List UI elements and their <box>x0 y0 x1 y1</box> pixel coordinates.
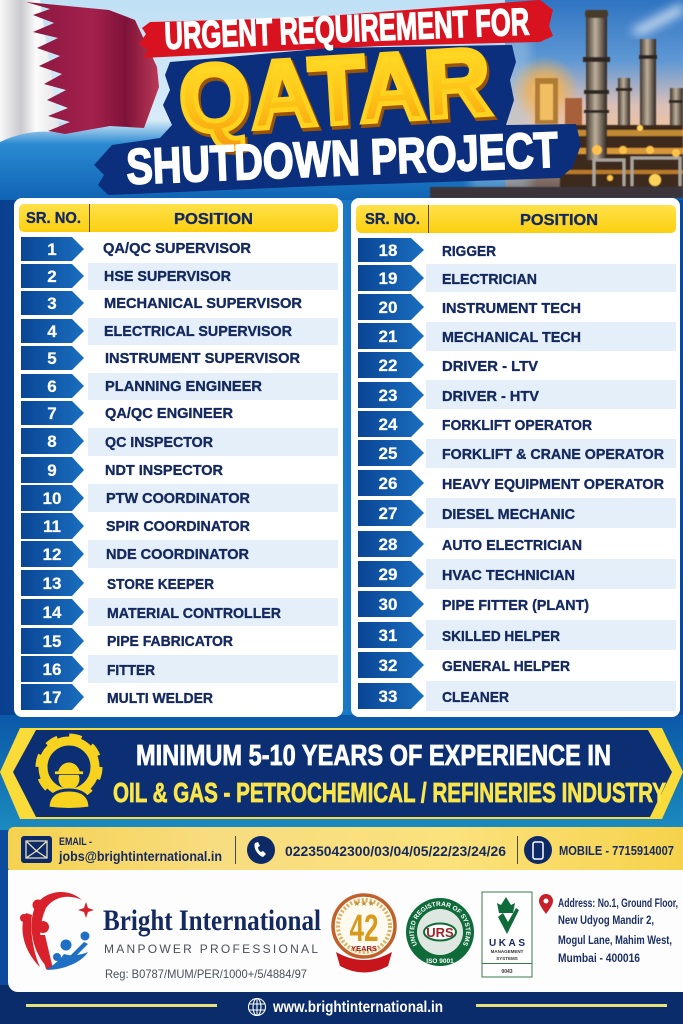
row 1: 1 <box>47 240 57 259</box>
row 4 <box>21 318 338 345</box>
icon: globe <box>248 998 266 1016</box>
row 10 <box>21 484 338 512</box>
row 12: 12 <box>43 545 61 564</box>
refinery illustration <box>430 10 683 198</box>
title: QATAR: QATAR <box>178 31 496 157</box>
website: www.brightinternational.in <box>272 999 443 1016</box>
row 15: 15 <box>43 632 61 651</box>
row 30 <box>358 591 589 617</box>
row 24: 24 <box>379 415 398 434</box>
row 23: 23 <box>379 386 397 405</box>
row 15: PIPE FABRICATOR <box>107 633 233 650</box>
row 7: QA/QC ENGINEER <box>105 405 233 422</box>
row 11: SPIR COORDINATOR <box>106 518 250 535</box>
footer <box>26 998 667 1016</box>
row 7 <box>21 401 233 425</box>
row 26: HEAVY EQUIPMENT OPERATOR <box>442 476 664 493</box>
row 2: HSE SUPERVISOR <box>104 268 231 285</box>
red brush banner <box>139 0 553 58</box>
address <box>558 898 678 965</box>
badge: URS ISO 9001 <box>406 898 474 966</box>
row 19: 19 <box>379 269 397 288</box>
row 12: NDE COORDINATOR <box>106 546 249 563</box>
contact strip <box>8 827 683 873</box>
row 5: INSTRUMENT SUPERVISOR <box>105 350 300 367</box>
row 18: RIGGER <box>442 243 496 260</box>
row 33: CLEANER <box>442 689 509 706</box>
badge: UKAS: 0043 <box>501 969 513 975</box>
row 9 <box>21 457 223 483</box>
icon: email <box>21 836 52 863</box>
navy brush behind title <box>94 45 581 195</box>
left table header <box>19 204 338 232</box>
row 28: 28 <box>379 535 397 554</box>
row 33 <box>358 681 676 711</box>
row 11: 11 <box>43 517 61 536</box>
row 32: GENERAL HELPER <box>442 658 570 675</box>
row 23: DRIVER - HTV <box>442 388 539 405</box>
row 6 <box>21 373 338 400</box>
title: shutdown project: SHUTDOWN PROJECT <box>125 122 559 195</box>
row 18: 18 <box>379 241 397 260</box>
left table header: POSITION <box>174 211 253 228</box>
title: QATAR: QATAR <box>176 28 494 154</box>
badge: URS ISO 9001: URS <box>426 925 454 940</box>
row 29: HVAC TECHNICIAN <box>442 567 575 584</box>
row 19 <box>358 264 676 292</box>
row 14: MATERIAL CONTROLLER <box>107 605 281 622</box>
tagline: MANPOWER PROFESSIONAL <box>104 942 318 956</box>
badge: UKAS <box>482 892 532 977</box>
badge: UKAS: SYSTEMS <box>496 956 518 961</box>
row 7: 7 <box>47 404 57 423</box>
row 3: 3 <box>47 294 57 313</box>
row 24: FORKLIFT OPERATOR <box>442 417 592 434</box>
row 15 <box>21 628 233 654</box>
row 13: STORE KEEPER <box>107 576 214 593</box>
left table header: SR. NO. <box>26 210 81 227</box>
row 25: 25 <box>379 444 397 463</box>
row 1 <box>21 237 251 261</box>
right table header: POSITION <box>520 212 598 229</box>
row 20: 20 <box>379 298 397 317</box>
badge: URS ISO 9001: UNITED REGISTRAR OF SYSTEMS <box>410 902 471 946</box>
row 23 <box>358 380 676 409</box>
row 5: 5 <box>47 349 57 368</box>
icon: gear with worker <box>39 737 99 810</box>
flag of Qatar <box>0 0 159 142</box>
row 27 <box>358 498 676 528</box>
row 31: SKILLED HELPER <box>442 628 560 645</box>
email text <box>58 836 222 864</box>
row 8: QC INSPECTOR <box>105 434 213 451</box>
row 1: QA/QC SUPERVISOR <box>103 240 251 257</box>
company name: Bright International <box>103 904 321 937</box>
row 13 <box>21 570 214 596</box>
panel: left table <box>14 198 343 717</box>
header photo background <box>0 0 683 200</box>
icon: phone <box>247 836 275 864</box>
row 31 <box>358 620 676 650</box>
row 19: ELECTRICIAN <box>442 271 537 288</box>
badge: 42 years: YEARS <box>351 944 377 953</box>
row 14: 14 <box>43 603 62 622</box>
row 17 <box>21 684 213 710</box>
row 29: 29 <box>379 565 397 584</box>
icon: location pin <box>539 894 553 914</box>
row 32: 32 <box>379 656 397 675</box>
row 26 <box>358 470 664 496</box>
row 11 <box>21 513 250 539</box>
row 27: DIESEL MECHANIC <box>442 506 575 523</box>
row 22 <box>358 352 538 378</box>
row 3 <box>21 291 302 315</box>
row 6: PLANNING ENGINEER <box>105 378 262 395</box>
logo mark <box>20 892 94 970</box>
row 30: 30 <box>379 595 397 614</box>
row 28: AUTO ELECTRICIAN <box>442 537 582 554</box>
row 14 <box>21 598 338 626</box>
badge: URS ISO 9001: ISO 9001 <box>426 958 454 965</box>
experience banner <box>0 728 683 819</box>
row 5 <box>21 346 300 370</box>
row 16: FITTER <box>107 662 155 679</box>
row 24 <box>358 411 592 437</box>
row 33: 33 <box>379 687 397 706</box>
row 2: 2 <box>47 267 57 286</box>
row 21: MECHANICAL TECH <box>442 329 581 346</box>
row 22: 22 <box>379 356 397 375</box>
row 32 <box>358 652 570 678</box>
row 25 <box>358 439 676 468</box>
company panel <box>8 870 683 992</box>
badge: 42 years: 42 <box>350 908 378 950</box>
phone numbers: 02235042300/03/04/05/22/23/24/26 <box>285 843 506 859</box>
row 26: 26 <box>379 474 397 493</box>
row 27: 27 <box>379 504 397 523</box>
row 6: 6 <box>47 377 57 396</box>
address: New Udyog Mandir 2, <box>558 915 654 927</box>
row 18 <box>358 238 496 262</box>
row 16 <box>21 655 338 683</box>
row 28 <box>358 531 582 557</box>
row 4: ELECTRICAL SUPERVISOR <box>104 323 292 340</box>
badge: 42 years: ★★★ <box>353 899 375 908</box>
row 12 <box>21 540 338 568</box>
row 25: FORKLIFT & CRANE OPERATOR <box>442 446 664 463</box>
row 9: NDT INSPECTOR <box>105 462 223 479</box>
row 29 <box>358 559 676 589</box>
email text: jobs@brightinternational.in <box>58 848 222 864</box>
row 16: 16 <box>43 660 61 679</box>
address: Mumbai - 400016 <box>558 953 640 965</box>
row 21 <box>358 322 676 351</box>
badge: 42 years <box>333 895 395 972</box>
row 31: 31 <box>379 626 397 645</box>
row 17: 17 <box>43 688 61 707</box>
row 3: MECHANICAL SUPERVISOR <box>104 295 302 312</box>
row 8 <box>21 428 338 456</box>
badge: UKAS: MANAGEMENT <box>491 949 524 954</box>
panel: right table <box>351 198 680 717</box>
row 17: MULTI WELDER <box>107 690 213 707</box>
row 8: 8 <box>47 432 57 451</box>
row 20: INSTRUMENT TECH <box>442 300 581 317</box>
email text: EMAIL - <box>59 836 92 848</box>
right table header: SR. NO. <box>365 211 420 228</box>
row 21: 21 <box>379 327 397 346</box>
row 30: PIPE FITTER (PLANT) <box>442 597 589 614</box>
row 13: 13 <box>43 574 61 593</box>
row 2 <box>21 263 338 290</box>
row 20 <box>358 294 581 320</box>
row 10: PTW COORDINATOR <box>106 490 250 507</box>
icon: mobile <box>524 836 552 864</box>
row 10: 10 <box>43 489 61 508</box>
right table header <box>356 205 676 233</box>
badge: UKAS: UKAS <box>489 938 525 949</box>
registration number: Reg: B0787/MUM/PER/1000+/5/4884/97 <box>105 967 307 981</box>
row 22: DRIVER - LTV <box>442 358 538 375</box>
row 4: 4 <box>47 322 57 341</box>
row 9: 9 <box>47 461 57 480</box>
